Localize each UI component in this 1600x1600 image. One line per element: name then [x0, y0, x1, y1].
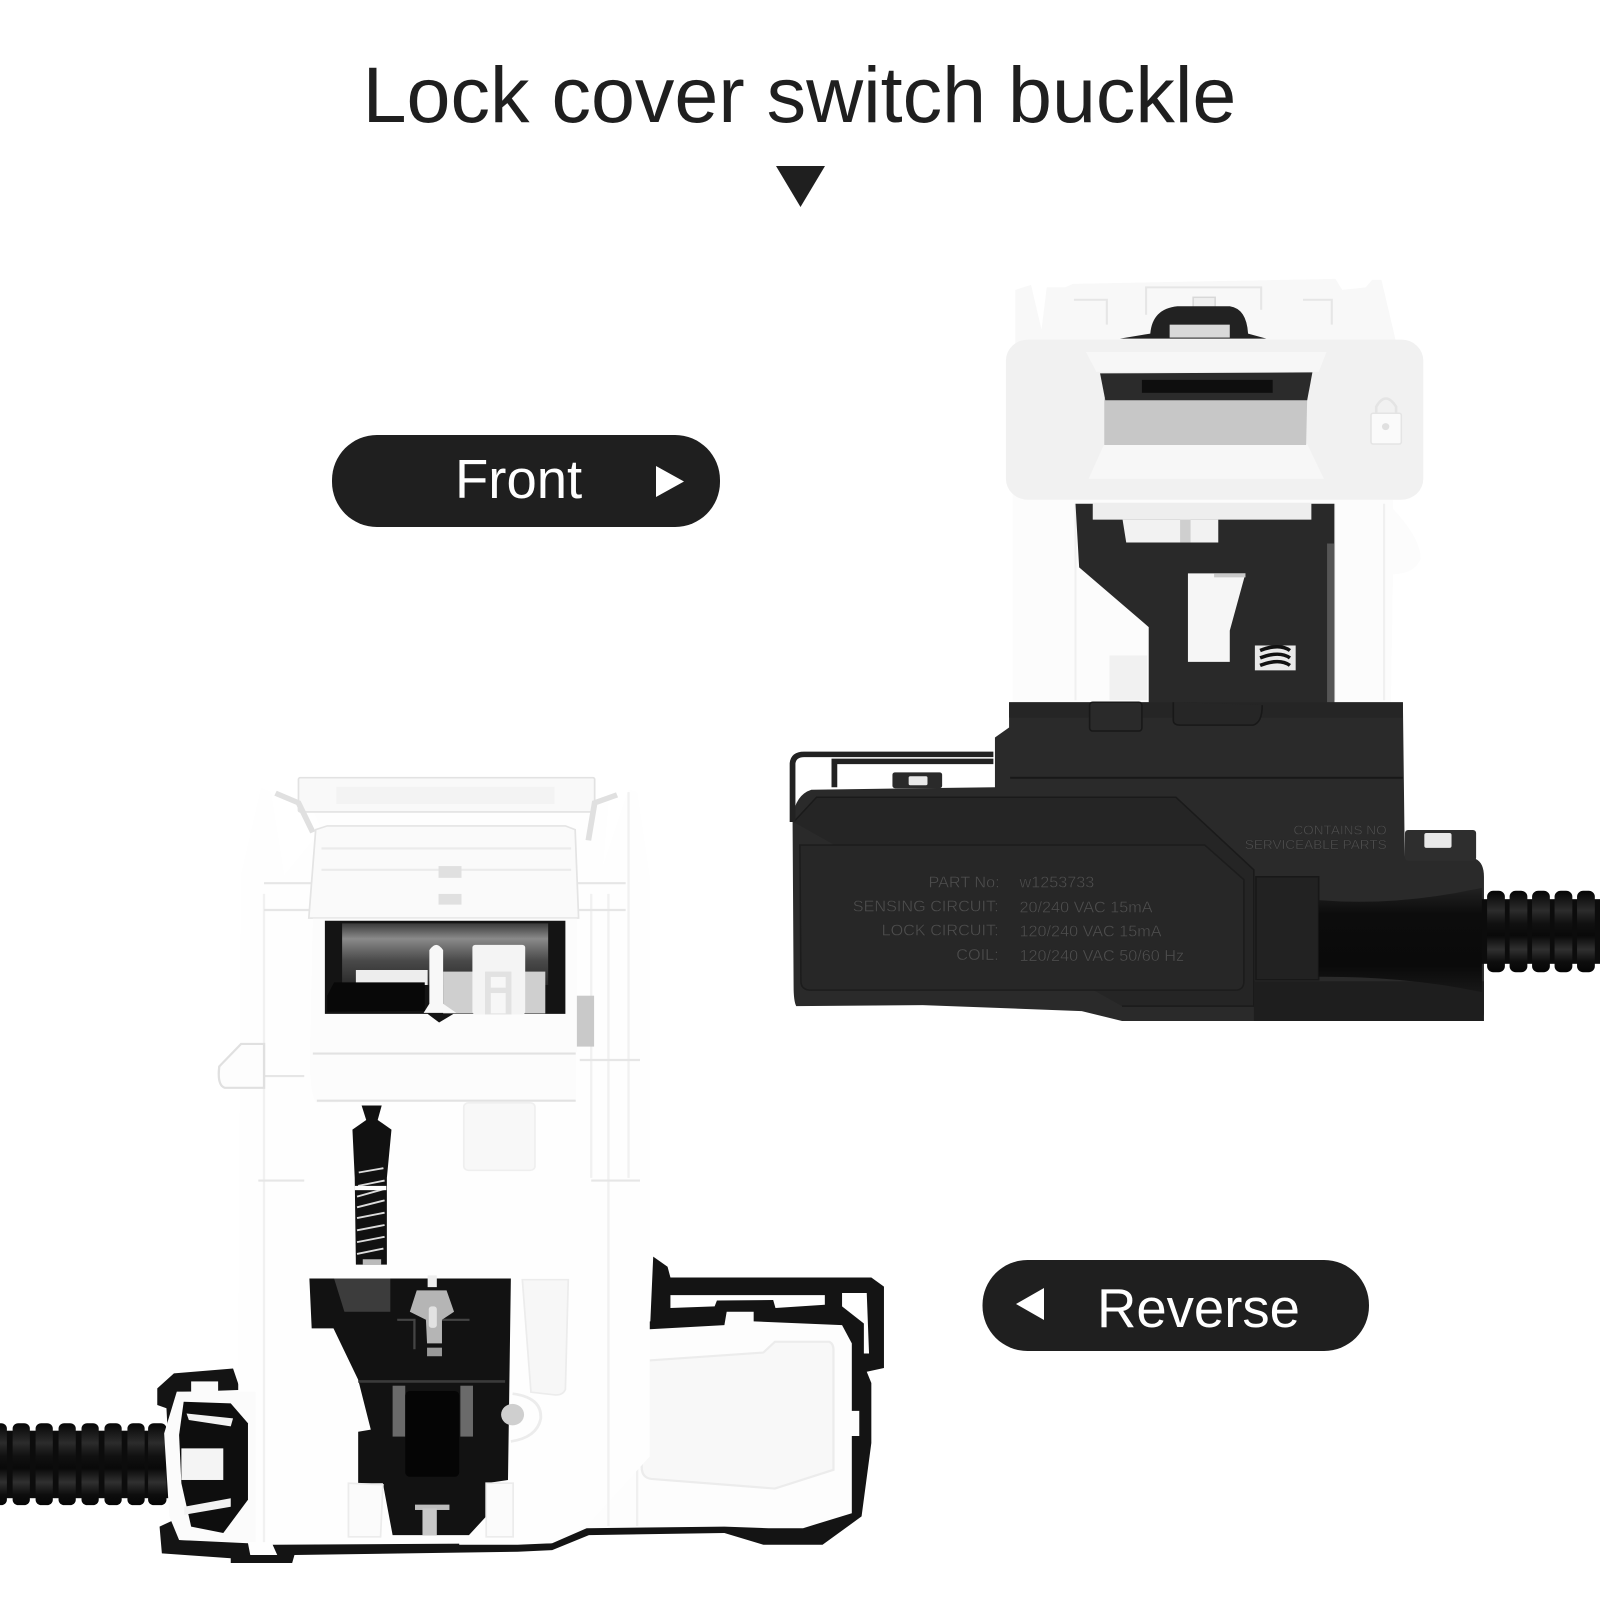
connector socket: [164, 1381, 255, 1542]
black latch tab: [1120, 306, 1266, 339]
cable gland: [1319, 888, 1482, 992]
right terminal pin: [1405, 830, 1476, 861]
right compartment: [459, 1312, 859, 1545]
molded spec text: 20/240 VAC 15mA: [1020, 900, 1153, 916]
product photo: reverse view of the lock switch: [0, 778, 884, 1563]
molded warning text: SERVICEABLE PARTS: [1245, 837, 1387, 852]
molded spec text: COIL:: [956, 947, 999, 964]
arrow: down triangle: [776, 166, 825, 207]
dark latch window: [325, 921, 565, 1022]
molded spec text: 120/240 VAC 15mA: [1020, 924, 1162, 940]
button: Front: [332, 435, 720, 527]
corrugated hose: [1481, 891, 1600, 972]
molded spec text: LOCK CIRCUIT:: [882, 923, 999, 939]
spring window: [1255, 645, 1296, 670]
top clip frame: [1015, 279, 1396, 345]
black housing: [793, 702, 1484, 1021]
silver latch: [410, 1275, 454, 1535]
black housing edge: [157, 1257, 884, 1563]
lock cover slot: [1100, 372, 1312, 445]
molded spec text: w1253733: [1019, 875, 1095, 892]
button: Reverse: Reverse: [1097, 1278, 1300, 1339]
left side tab: [219, 1044, 264, 1088]
title: Lock cover switch buckle: [363, 50, 1236, 139]
product photo: front view of the lock switch: [793, 279, 1600, 1021]
wire clip frame: [793, 754, 993, 822]
button: Reverse: [982, 1260, 1369, 1351]
main white body: [179, 788, 650, 1555]
button: Front: Front: [455, 449, 582, 510]
molded spec text: PART No:: [929, 875, 1000, 892]
white feet: [348, 1483, 513, 1537]
lower white body: [1013, 494, 1421, 703]
white gaps in wire clip: [670, 1293, 869, 1354]
molded warning text: [1245, 823, 1387, 852]
lower mechanism cavity: [309, 1279, 511, 1535]
molded spec text: 120/240 VAC 50/60 Hz: [1020, 948, 1184, 965]
molded warning text: CONTAINS NO: [1293, 823, 1387, 837]
head block: [1006, 340, 1423, 500]
right raised rib and round hole: [501, 1280, 568, 1441]
corrugated hose: [0, 1423, 169, 1505]
upper panel: [309, 826, 579, 918]
window frame panel: [310, 919, 594, 1103]
dark slider plate: [1075, 503, 1334, 704]
molded spec text: SENSING CIRCUIT:: [853, 899, 999, 915]
faint raised tab: [464, 1103, 535, 1170]
top lid: [276, 778, 617, 840]
molded spec text: [853, 875, 1184, 965]
spring slot: [352, 1106, 391, 1265]
icon: padlock: [1371, 399, 1401, 444]
